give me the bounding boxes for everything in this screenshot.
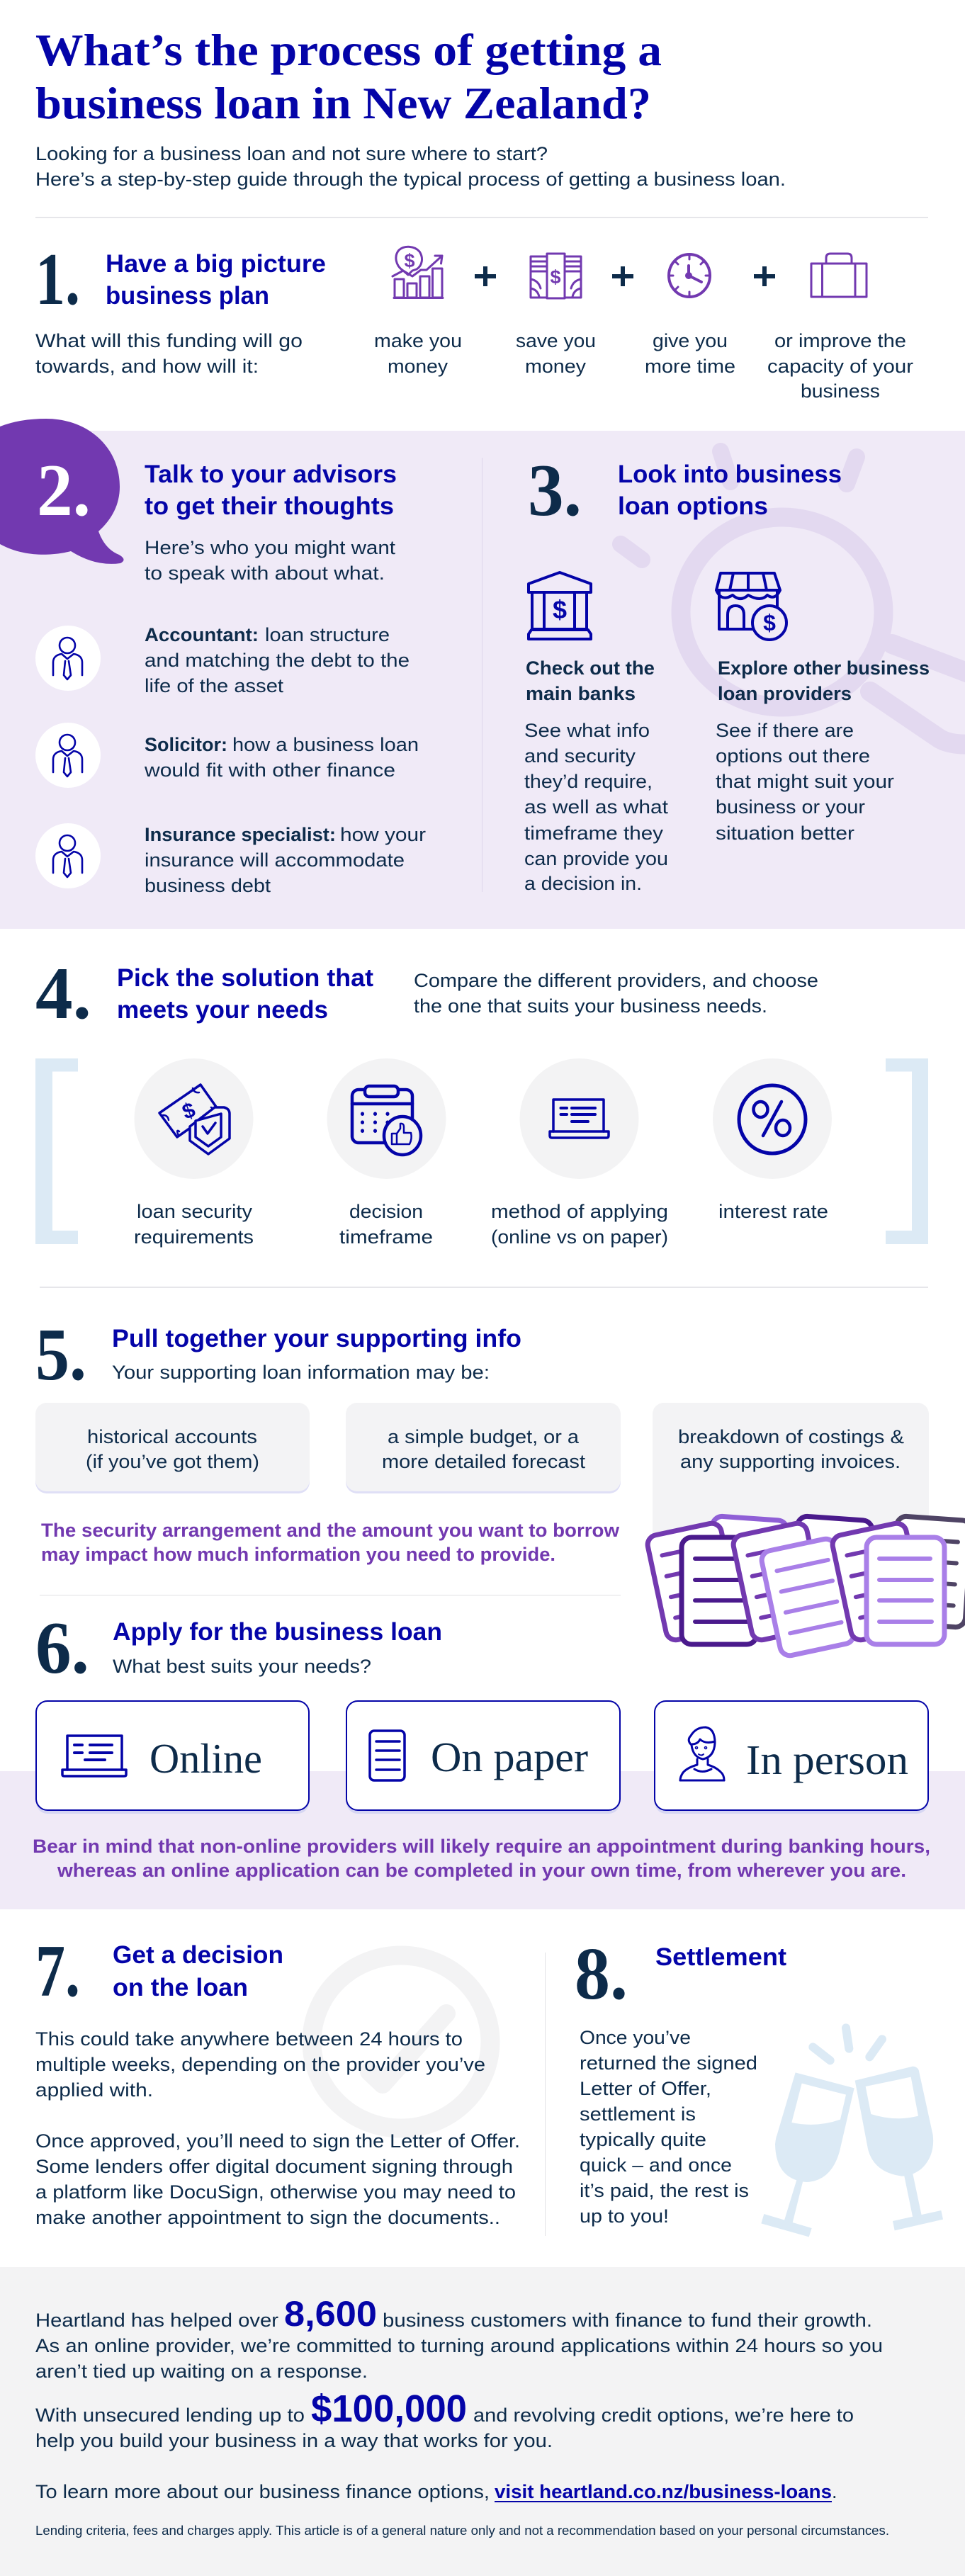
step 7 text: This could take anywhere between 24 hours to bbox=[35, 2028, 463, 2050]
intro text: Looking for a business loan and not sure where to start? bbox=[35, 143, 548, 164]
lending paragraph: With unsecured lending up to bbox=[35, 2405, 305, 2426]
option: main banks: Check out the bbox=[526, 657, 655, 679]
icon: make you money bbox=[393, 247, 443, 298]
step 1 heading: Have a big picture bbox=[106, 250, 326, 278]
insurance text: how your bbox=[340, 824, 426, 845]
step 3 number: 3. bbox=[528, 448, 582, 531]
accountant text: loan structure bbox=[265, 624, 390, 645]
step 4 text: the one that suits your business needs. bbox=[414, 995, 767, 1017]
solicitor text: how a business loan bbox=[232, 734, 419, 755]
option: other providers: Explore other business bbox=[718, 657, 930, 679]
icon labels: business bbox=[801, 380, 880, 402]
step 2 intro bbox=[145, 537, 396, 584]
icon labels: give you bbox=[653, 330, 728, 351]
intro text bbox=[35, 143, 786, 190]
title: business loan in New Zealand? bbox=[35, 78, 651, 128]
left bracket bbox=[35, 1058, 78, 1244]
step 8 text: it’s paid, the rest is bbox=[580, 2180, 749, 2201]
card: budget: a simple budget, or a bbox=[388, 1426, 580, 1447]
link paragraph: To learn more about our business finance options, bbox=[35, 2481, 490, 2502]
plus bbox=[475, 266, 496, 286]
panel: step 5 bbox=[35, 1313, 965, 1657]
step 4 heading: meets your needs bbox=[117, 996, 328, 1024]
option: online: Online bbox=[149, 1735, 262, 1782]
icon labels bbox=[374, 330, 913, 402]
step 8 text: typically quite bbox=[580, 2129, 706, 2150]
option: main banks: See what info bbox=[524, 720, 650, 741]
step 7 text: applied with. bbox=[35, 2079, 153, 2101]
panel: step 4 bbox=[35, 951, 928, 1248]
panel: step 2 bbox=[0, 419, 426, 896]
panel: step 7 bbox=[35, 1929, 520, 2228]
link paragraph bbox=[35, 2481, 837, 2502]
step 7 text: Some lenders offer digital document signing through bbox=[35, 2156, 513, 2177]
criterion: decision timeframe bbox=[327, 1058, 446, 1179]
icon labels: make you bbox=[374, 330, 462, 351]
lending paragraph bbox=[35, 2388, 854, 2451]
step 7 heading: on the loan bbox=[113, 1974, 248, 2001]
step 4 text bbox=[414, 970, 818, 1017]
illustration: stack of documents bbox=[646, 1515, 965, 1657]
callout: security: may impact how much information you need to provide. bbox=[41, 1544, 555, 1565]
icon: solicitor bbox=[35, 723, 101, 788]
step 6 heading: Apply for the business loan bbox=[113, 1618, 442, 1646]
step 2 heading: to get their thoughts bbox=[145, 492, 394, 520]
step 8 text: Letter of Offer, bbox=[580, 2078, 711, 2099]
step 2 heading bbox=[145, 461, 397, 520]
option: in person bbox=[655, 1701, 928, 1814]
step 2 number: 2. bbox=[37, 448, 91, 531]
option: on paper: On paper bbox=[431, 1734, 588, 1780]
checkmark watermark bbox=[312, 1955, 490, 2128]
step 4 number: 4. bbox=[35, 951, 91, 1034]
step 8 text: quick – and once bbox=[580, 2154, 732, 2176]
option: main banks: a decision in. bbox=[524, 873, 642, 894]
card: historical accounts: (if you’ve got them) bbox=[86, 1451, 259, 1472]
right bracket bbox=[886, 1058, 928, 1244]
icon: save you money: $ bbox=[550, 266, 561, 288]
option: main banks: main banks bbox=[526, 683, 636, 704]
insurance text: insurance will accommodate bbox=[145, 849, 405, 871]
step 7 heading: Get a decision bbox=[113, 1941, 283, 1969]
criteria labels: requirements bbox=[134, 1226, 254, 1248]
step 1 heading bbox=[106, 250, 326, 310]
step 6 subheading: What best suits your needs? bbox=[113, 1656, 371, 1677]
step 2 heading: Talk to your advisors bbox=[145, 461, 397, 488]
step 8 number: 8. bbox=[575, 1932, 628, 2015]
criterion: interest rate bbox=[713, 1058, 832, 1179]
insurance text: Insurance specialist: bbox=[145, 824, 336, 845]
accountant text: and matching the debt to the bbox=[145, 650, 410, 671]
step 7 text: make another appointment to sign the documents.. bbox=[35, 2207, 500, 2228]
criterion: loan security: $ bbox=[179, 1098, 198, 1124]
step 1 text: towards, and how will it: bbox=[35, 356, 259, 377]
option: online bbox=[36, 1701, 309, 1814]
option: main banks: as well as what bbox=[524, 796, 669, 818]
callout: security bbox=[41, 1520, 620, 1565]
icon: store: $ bbox=[763, 610, 776, 635]
icon: store bbox=[716, 573, 786, 640]
step 8 heading: Settlement bbox=[655, 1943, 786, 1971]
panel: step 3 bbox=[524, 448, 930, 894]
step 1 text bbox=[35, 330, 303, 377]
icon: bank: $ bbox=[553, 595, 567, 624]
step 7 text: multiple weeks, depending on the provider you’ve bbox=[35, 2054, 485, 2075]
step 1 heading: business plan bbox=[106, 282, 269, 310]
accountant text: Accountant: bbox=[145, 624, 259, 645]
step 3 heading: loan options bbox=[618, 492, 768, 520]
accountant text: life of the asset bbox=[145, 675, 284, 696]
panel: heartland summary bbox=[0, 2267, 965, 2576]
step 1 number: 1. bbox=[35, 237, 80, 320]
icon labels: or improve the bbox=[774, 330, 906, 351]
step 5 subheading: Your supporting loan information may be: bbox=[112, 1362, 490, 1383]
title bbox=[35, 25, 662, 128]
callout: banking hours: Bear in mind that non-online providers will likely require an appointment during banking hours, bbox=[33, 1836, 930, 1857]
criteria labels: (online vs on paper) bbox=[491, 1226, 668, 1248]
step 2 intro: Here’s who you might want bbox=[145, 537, 396, 558]
option: other providers: situation better bbox=[716, 823, 854, 844]
card: historical accounts bbox=[35, 1403, 310, 1493]
criteria labels: method of applying bbox=[491, 1201, 668, 1222]
customers paragraph: As an online provider, we’re committed to turning around applications within 24 hours so you bbox=[35, 2335, 883, 2356]
icon labels: save you bbox=[516, 330, 596, 351]
step 7 text bbox=[35, 2028, 520, 2228]
callout: security: The security arrangement and the amount you want to borrow bbox=[41, 1520, 620, 1541]
lending paragraph: $100,000 bbox=[311, 2388, 467, 2430]
insurance text: business debt bbox=[145, 875, 271, 896]
option: other providers: loan providers bbox=[718, 683, 852, 704]
card: costings: any supporting invoices. bbox=[680, 1451, 901, 1472]
step 3 heading bbox=[618, 461, 842, 520]
criteria labels: timeframe bbox=[339, 1226, 433, 1248]
step 2 intro: to speak with about what. bbox=[145, 563, 385, 584]
option: main banks: timeframe they bbox=[524, 823, 664, 844]
option: other providers: business or your bbox=[716, 796, 865, 818]
icon labels: capacity of your bbox=[767, 356, 913, 377]
card: budget bbox=[346, 1403, 621, 1493]
criterion: loan security bbox=[135, 1058, 254, 1179]
icon: save you money bbox=[531, 254, 581, 298]
solicitor text bbox=[144, 734, 419, 781]
icon: accountant bbox=[35, 626, 101, 691]
step 8 text: returned the signed bbox=[580, 2052, 757, 2074]
criteria labels: interest rate bbox=[718, 1201, 828, 1222]
icon: make you money: $ bbox=[404, 250, 415, 271]
icon: bank bbox=[529, 572, 591, 639]
title: What’s the process of getting a bbox=[35, 25, 662, 75]
option: other providers: See if there are bbox=[716, 720, 854, 741]
step 8 text: settlement is bbox=[580, 2103, 696, 2125]
step 4 heading bbox=[117, 964, 373, 1024]
option: main banks bbox=[524, 657, 669, 894]
step 4 heading: Pick the solution that bbox=[117, 964, 373, 992]
step 7 text: Once approved, you’ll need to sign the Letter of Offer. bbox=[35, 2130, 520, 2152]
card: costings bbox=[653, 1403, 929, 1544]
step 7 heading bbox=[113, 1941, 283, 2001]
customers paragraph: aren’t tied up waiting on a response. bbox=[35, 2361, 368, 2382]
icon: insurance specialist bbox=[35, 823, 101, 888]
speech bubble bbox=[0, 419, 124, 564]
callout: banking hours bbox=[33, 1836, 930, 1881]
card: costings: breakdown of costings & bbox=[678, 1426, 904, 1447]
option: in person: In person bbox=[746, 1736, 908, 1783]
option: other providers bbox=[716, 657, 930, 844]
option: on paper bbox=[346, 1701, 620, 1814]
magnifier watermark bbox=[621, 451, 965, 745]
criteria labels: loan security bbox=[137, 1201, 253, 1222]
link paragraph: . bbox=[832, 2481, 837, 2502]
panel: step 1 bbox=[35, 237, 913, 402]
criterion: method of applying bbox=[520, 1058, 639, 1179]
step 8 text: up to you! bbox=[580, 2205, 669, 2227]
insurance text bbox=[145, 824, 426, 896]
step 7 text: a platform like DocuSign, otherwise you may need to bbox=[35, 2181, 516, 2203]
panel: step 6 bbox=[33, 1606, 930, 1881]
icon: briefcase bbox=[811, 254, 867, 297]
accountant text bbox=[145, 624, 410, 696]
step 3 heading: Look into business bbox=[618, 461, 842, 488]
card: historical accounts: historical accounts bbox=[87, 1426, 257, 1447]
plus bbox=[612, 266, 633, 286]
link paragraph: visit heartland.co.nz/business-loans bbox=[495, 2481, 832, 2502]
option: main banks: they’d require, bbox=[524, 771, 653, 792]
illustration: champagne glasses bbox=[761, 2028, 943, 2237]
customers paragraph: 8,600 bbox=[284, 2294, 377, 2334]
solicitor text: Solicitor: bbox=[145, 734, 227, 755]
icon labels: money bbox=[388, 356, 448, 377]
card: budget: more detailed forecast bbox=[382, 1451, 586, 1472]
icon labels: more time bbox=[645, 356, 735, 377]
option: other providers: that might suit your bbox=[716, 771, 894, 792]
option: other providers: options out there bbox=[716, 745, 870, 767]
option: main banks: and security bbox=[524, 745, 636, 767]
criteria labels bbox=[134, 1201, 828, 1248]
step 4 text: Compare the different providers, and choose bbox=[414, 970, 818, 991]
plus bbox=[754, 266, 775, 286]
lending paragraph: and revolving credit options, we’re here to bbox=[473, 2405, 854, 2426]
icon labels: money bbox=[525, 356, 587, 377]
step 7 number: 7. bbox=[35, 1929, 80, 2012]
icon: clock bbox=[669, 254, 710, 297]
step 8 text: Once you’ve bbox=[580, 2027, 691, 2048]
solicitor text: would fit with other finance bbox=[144, 759, 395, 781]
step 1 text: What will this funding will go bbox=[35, 330, 303, 351]
panel: step 8 bbox=[575, 1932, 943, 2237]
step 8 text bbox=[580, 2027, 757, 2227]
customers paragraph: business customers with finance to fund their growth. bbox=[383, 2310, 872, 2331]
option: main banks: can provide you bbox=[524, 848, 668, 869]
step 6 number: 6. bbox=[35, 1606, 89, 1689]
panel: step 6 background band bbox=[0, 1771, 965, 1909]
callout: banking hours: whereas an online application can be completed in your own time, from wherever you are. bbox=[57, 1860, 906, 1881]
customers paragraph: Heartland has helped over bbox=[35, 2310, 278, 2331]
lending paragraph: help you build your business in a way that works for you. bbox=[35, 2430, 553, 2451]
customers paragraph bbox=[35, 2294, 883, 2382]
panel: steps 2 and 3 background bbox=[0, 431, 965, 929]
criteria labels: decision bbox=[349, 1201, 423, 1222]
disclaimer: Lending criteria, fees and charges apply. This article is of a general nature only and not a recommendation based on your personal circumstances. bbox=[35, 2524, 889, 2538]
step 5 heading: Pull together your supporting info bbox=[112, 1325, 521, 1352]
intro text: Here’s a step-by-step guide through the typical process of getting a business loan. bbox=[35, 169, 786, 190]
step 5 number: 5. bbox=[35, 1313, 86, 1396]
